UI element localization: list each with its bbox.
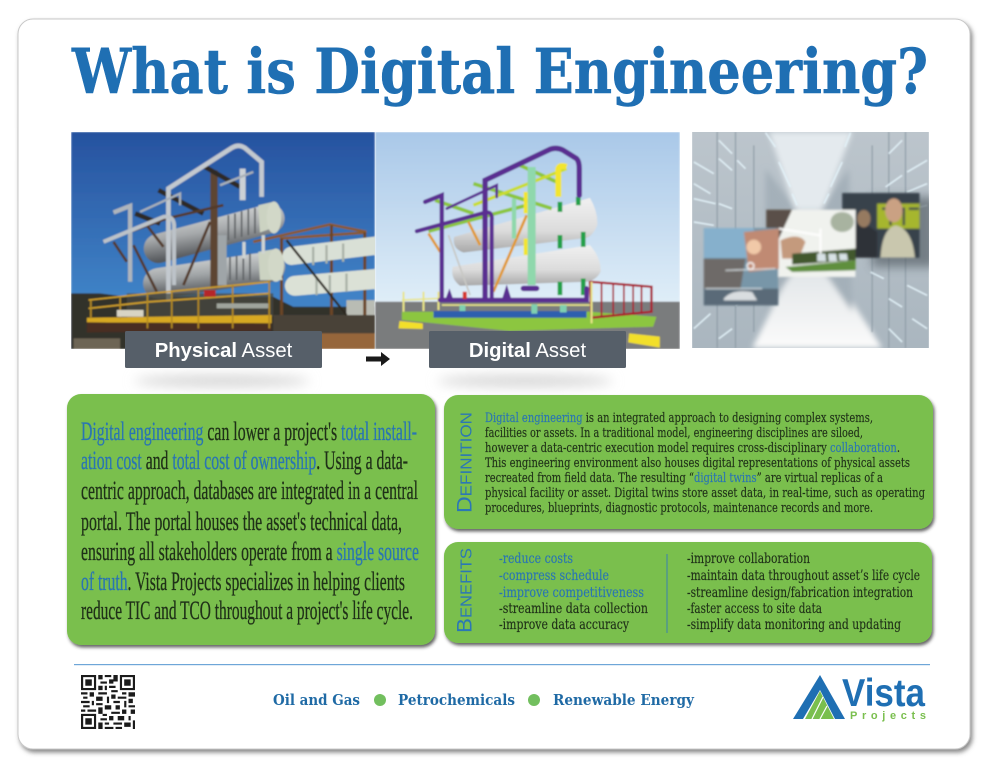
- label: physical asset: Physical Asset: [155, 340, 293, 362]
- definition text: procedures, blueprints, diagnostic protocols, maintenance records and more.: [485, 501, 873, 516]
- label shadow: [437, 375, 613, 387]
- definition text: recreated from field data. The resulting “digital twins” are virtual replicas of a: [485, 471, 883, 486]
- benefits list: right column: [687, 551, 920, 633]
- label: digital asset: [429, 331, 626, 368]
- definition text: [485, 411, 925, 516]
- panel: intro: [67, 394, 435, 645]
- logo: Vista Projects: Projects: [850, 710, 926, 722]
- photo: digital asset model: [375, 132, 680, 349]
- label: physical asset: [125, 331, 322, 368]
- green steel: [428, 165, 557, 231]
- intro text: ation cost and total cost of ownership. Using a data-: [81, 446, 408, 475]
- intro text: ensuring all stakeholders operate from a single source: [81, 537, 419, 566]
- steel: [203, 170, 225, 288]
- definition text: facilities or assets. In a traditional model, engineering disciplines are siloed,: [485, 426, 863, 441]
- footer sectors: Petrochemicals: [398, 691, 515, 709]
- platform: [127, 293, 273, 317]
- benefits list: right column: -improve collaboration: [687, 551, 810, 567]
- benefits list: left column: -improve competitiveness: [499, 585, 644, 601]
- intro text: reduce TIC and TCO throughout a project's life cycle.: [81, 596, 413, 625]
- vessels: [158, 219, 270, 248]
- benefits list: right column: -streamline design/fabrication integration: [687, 585, 913, 601]
- label: digital asset: Digital Asset: [469, 340, 586, 362]
- benefits list: right column: -simplify data monitoring and updating: [687, 617, 901, 633]
- intro text: centric approach, databases are integrated in a central: [81, 476, 418, 505]
- logo: Vista Projects: [793, 672, 926, 722]
- benefits divider: [666, 554, 668, 633]
- footer sectors: [273, 691, 695, 709]
- back frames: [253, 225, 366, 242]
- benefits list: left column: -improve data accuracy: [499, 617, 629, 633]
- benefits heading: BENEFITS: [454, 548, 476, 633]
- project images: [842, 193, 920, 258]
- arrow: [366, 352, 390, 366]
- benefits list: left column: -compress schedule: [499, 568, 609, 584]
- definition heading: DEFINITION: [454, 412, 476, 513]
- intro text: [81, 417, 419, 625]
- intro text: of truth. Vista Projects specializes in helping clients: [81, 567, 405, 596]
- definition text: however a data-centric execution model requires cross-disciplinary collaboration.: [485, 441, 900, 456]
- panel: benefits: [444, 542, 932, 643]
- label shadow: [134, 375, 310, 387]
- benefits list: left column: -reduce costs: [499, 551, 573, 567]
- footer sectors: Renewable Energy: [553, 691, 695, 709]
- deck: [402, 312, 656, 331]
- photo: data center with project images: [692, 132, 936, 348]
- benefits list: left column: [499, 551, 648, 633]
- pipes: [168, 146, 262, 302]
- purple pipes: [417, 148, 587, 300]
- QR code: [81, 675, 135, 729]
- definition text: Digital engineering is an integrated approach to designing complex systems,: [485, 411, 873, 426]
- benefits list: left column: -streamline data collection: [499, 601, 648, 617]
- intro text: portal. The portal houses the asset's technical data,: [81, 507, 402, 536]
- benefits list: right column: -maintain data throughout asset’s life cycle: [687, 568, 920, 584]
- intro text: Digital engineering can lower a project's total install-: [81, 417, 417, 446]
- panel: definition: [444, 395, 933, 529]
- footer sectors: Oil and Gas: [273, 691, 360, 709]
- drums: [454, 198, 597, 252]
- photo: physical asset: [71, 132, 375, 349]
- benefits list: right column: -faster access to site data: [687, 601, 822, 617]
- logo: Vista Projects: Vista: [842, 672, 925, 715]
